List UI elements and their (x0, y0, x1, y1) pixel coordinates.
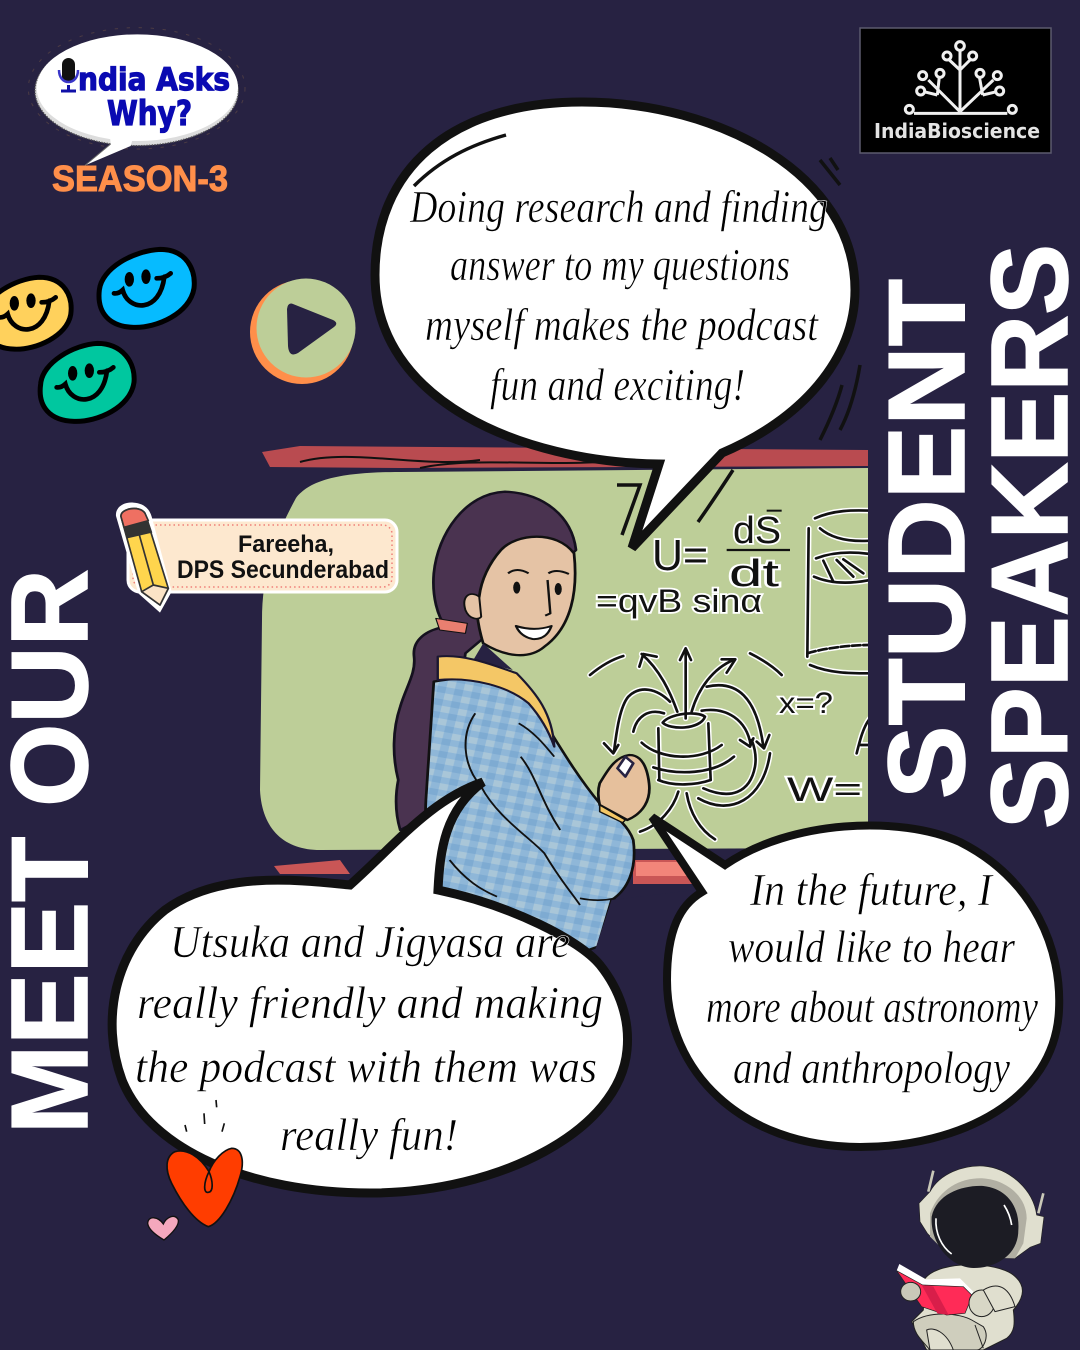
icon: astronaut reading (897, 1166, 1044, 1350)
quote text: top (409, 181, 828, 410)
speech bubble: right (652, 817, 1059, 1147)
quote text: left: really friendly and making (137, 977, 603, 1028)
girl collar (438, 656, 554, 747)
school text: DPS Secunderabad (177, 556, 389, 584)
name tag (116, 503, 397, 613)
astronaut helmet (919, 1166, 1044, 1258)
icon: play button (250, 278, 356, 384)
quote text: left: the podcast with them was (135, 1041, 597, 1092)
bubble shape with tail (375, 102, 855, 548)
name text: Fareeha, (238, 531, 334, 558)
title: student: STUDENT (866, 279, 988, 799)
icon: blue smiley (99, 249, 194, 327)
quote text: top: Doing research and finding (409, 181, 828, 232)
astronaut visor (932, 1186, 1018, 1268)
bubble shape with tail (112, 782, 628, 1193)
formula: W=: W= (787, 771, 862, 809)
icon: tree (905, 42, 1016, 113)
formula: dt: dt (729, 553, 780, 595)
name tag card (128, 520, 397, 592)
logo speech bubble (28, 28, 245, 165)
quote text: left: really fun! (280, 1109, 458, 1160)
quote text: left (135, 916, 603, 1160)
girl: student at the board (394, 492, 694, 960)
icon: green smiley (40, 343, 134, 421)
quote text: right: In the future, I (749, 864, 994, 915)
speech bubble: top (375, 102, 860, 548)
icon: hearts (148, 1100, 242, 1240)
icon: yellow smiley (0, 277, 71, 349)
quote text: right (706, 864, 1038, 1093)
chalkboard (260, 446, 870, 884)
season label: SEASON-3 (52, 158, 228, 199)
quote text: top: answer to my questions (450, 239, 790, 290)
logo text: Why?: Why? (107, 94, 192, 134)
girl face (477, 537, 575, 655)
quote text: top: myself makes the podcast (425, 299, 819, 350)
board top ledge (262, 446, 868, 468)
IndiaBioscience wordmark: IndiaBioscience (874, 119, 1040, 143)
astronaut hands (901, 1282, 921, 1301)
icon: pencil (116, 503, 172, 613)
quote text: top: fun and exciting! (490, 359, 745, 410)
astronaut antennas (928, 1171, 1043, 1213)
quote text: right: would like to hear (728, 921, 1016, 972)
logo text: India Asks: ndia Asks (78, 62, 230, 98)
icon: red heart (167, 1148, 242, 1227)
girl hair and braid (394, 492, 576, 830)
icon: pink heart (148, 1216, 178, 1240)
speech bubble: left (112, 782, 628, 1193)
icon: microphone (59, 58, 78, 91)
formula: qvB sin alpha: =qvB sinα (596, 583, 762, 619)
girl skirt (592, 890, 694, 960)
quote text: left: Utsuka and Jigyasa are (170, 916, 570, 967)
logo: IndiaBioscience (860, 28, 1051, 153)
bubble shape with tail (652, 817, 1059, 1147)
formula: dS: dS (733, 510, 781, 552)
bubble accent marks (414, 135, 860, 535)
board drawing: magnetic field (590, 510, 870, 839)
girl shirt (426, 679, 634, 960)
board bottom ledge (274, 860, 695, 884)
formula: U equals: U= (652, 531, 708, 580)
board surface (260, 468, 868, 850)
astronaut book (896, 1264, 974, 1294)
logo: India Asks Why season 3 (28, 28, 245, 199)
quote text: right: and anthropology (733, 1042, 1010, 1093)
girl hand with chalk (598, 755, 649, 820)
astronaut body (912, 1265, 1022, 1350)
formula: x=?: x=? (779, 687, 833, 720)
